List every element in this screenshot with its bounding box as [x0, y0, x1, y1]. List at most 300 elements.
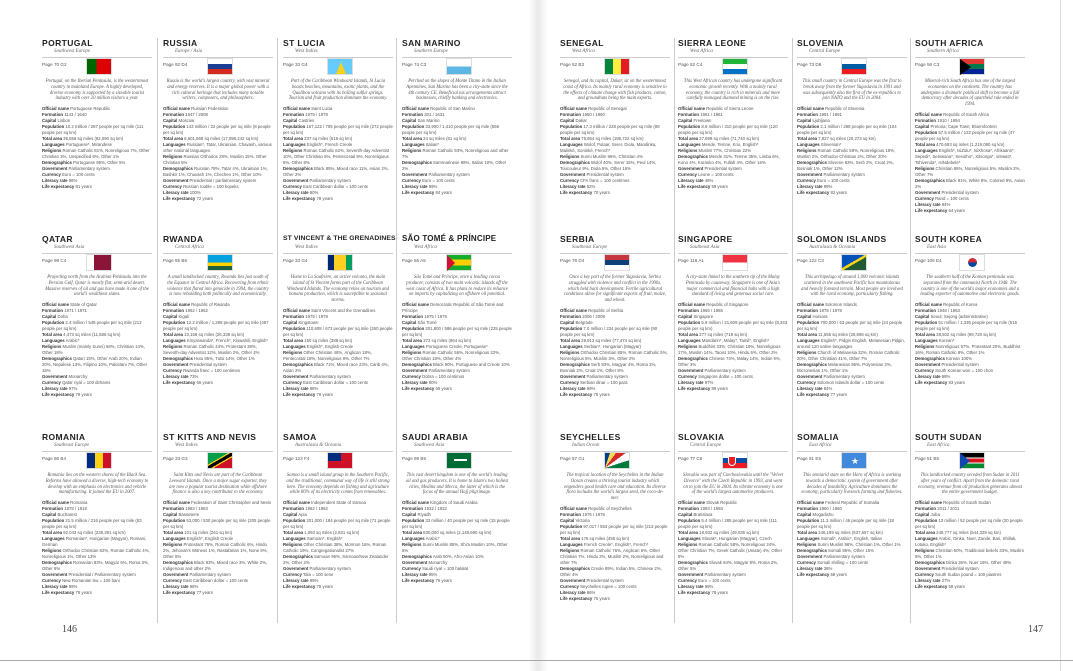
- card: Sao Tome: SÃO TOMÉ & PRÍNCIPE: [402, 234, 496, 243]
- card: Samoa: Currency Tala = 100 sene: [283, 572, 333, 577]
- card: St Kitts: West Indies: [175, 443, 198, 448]
- card: Somalia: Formation 1960 / 1960: [797, 506, 842, 511]
- card: Seychelles: Capital Victoria: [560, 518, 590, 523]
- card: Sierra Leone: West Africa: [690, 49, 713, 54]
- card: Slovakia: Central Europe: [690, 443, 721, 448]
- card: Senegal: Life expectancy 70 years: [560, 190, 610, 195]
- card: South Africa: SOUTH AFRICA: [915, 38, 984, 48]
- card: St Lucia: Page 33 G4: [283, 62, 308, 67]
- card: St Lucia: West Indies: [295, 49, 318, 54]
- card: Qatar: Capital Doha: [42, 314, 68, 319]
- card: Samoa: Formation 1962 / 1962: [283, 506, 328, 511]
- card: Serbia: Formation 2006 / 2008: [560, 314, 605, 319]
- card: Slovenia: Demographics Slovene 83%, Serb 2%, Croat 2%, Bosniak 1%, Other 12%: [797, 160, 894, 171]
- card: South Korea: Life expectancy 83 years: [915, 380, 965, 385]
- card: Rwanda: Religions Roman Catholic 44%, Protestant 38%, Seventh-day Adventist 12%, Muslim 2%, Other 4%: [163, 344, 260, 355]
- card: South Africa: Formation 1910 / 1994: [915, 118, 960, 123]
- card: Singapore: Demographics Chinese 74%, Malay 14%, Indian 9%, Other 3%: [678, 356, 781, 367]
- card: Romania: Languages Romanian*, Hungarian (Magyar), Romani, German: [42, 536, 146, 547]
- card: South Africa: Page 56 C3: [915, 62, 939, 67]
- card: St Vincent: Formation 1979 / 1979: [283, 314, 328, 319]
- card: St Lucia: Capital Castries: [283, 118, 314, 123]
- card: Slovenia: Literacy rate 99%: [797, 184, 832, 189]
- card: Samoa: Religions Other Christian 38%, Mormon 16%, Roman Catholic 19%, Congregationalist 27%: [283, 542, 386, 553]
- card: Russia: Life expectancy 72 years: [163, 196, 213, 201]
- card: Serbia: [560, 234, 670, 397]
- card: Rwanda: [163, 234, 273, 385]
- card: Qatar: Government Monarchy: [42, 374, 87, 379]
- card: Slovenia: SLOVENIA: [797, 38, 844, 48]
- card: Portugal: Total area 35,556 sq miles (92,090 sq km): [42, 136, 123, 141]
- card: Senegal: Languages Wolof, Pulaar, Serer, Diola, Mandinka, Malinké, Soninké, French*: [560, 142, 656, 153]
- card: Sierra Leone: Capital Freetown: [678, 118, 711, 123]
- card: Samoa: Samoa is a small island group in the Southern Pacific, and the traditional, communal way of life is still strong here. The economy depends on fishing and agriculture while 80% of its electricity comes from renewables.: [286, 473, 390, 495]
- card: San Marino: Population 33,900 / 1,410 people per sq mile (556 people per sq km): [402, 124, 499, 135]
- card: South Sudan: [915, 432, 1025, 589]
- card: St Vincent: Home to La Soufrière, an active volcano, the main island of St Vincent forms part of the Caribbean Windward Islands. The economy relies on tourism and banana production, which is susceptible to seasonal storms.: [287, 275, 389, 303]
- card: Portugal: Literacy rate 96%: [42, 178, 77, 183]
- card: Solomon Islands: Government Parliamentary system: [797, 374, 865, 379]
- card: St Lucia: Population 167,122 / 705 people per sq mile (272 people per sq km): [283, 124, 393, 135]
- card: Senegal: [560, 38, 670, 195]
- card: Solomon Islands: Life expectancy 77 years: [797, 392, 847, 397]
- card: San Marino: Total area 24 sq miles (61 sq km): [402, 136, 466, 141]
- card: Rwanda: Central Africa: [175, 245, 204, 250]
- card: South Sudan: Demographics Dinka 36%, Nuer 16%, Other 48%: [915, 560, 1011, 565]
- card: Saudi Arabia: [402, 432, 512, 583]
- card: St Kitts: Population 53,000 / 530 people per sq mile (205 people per sq km): [163, 518, 270, 529]
- card: Senegal: Page 52 B3: [560, 62, 584, 67]
- card: Rwanda: Page 55 B6: [163, 258, 187, 263]
- card: St Lucia: Total area 237 sq miles (616 sq km): [283, 136, 352, 141]
- card: Sao Tome: Demographics Black 90%, Portuguese and Creole 10%: [402, 362, 510, 367]
- card: Sierra Leone: Population 8.6 million / 310 people per sq mile (120 people per sq km): [678, 124, 778, 135]
- card: Senegal: Total area 75,954 sq miles (196,722 sq km): [560, 136, 644, 141]
- card: South Korea: Currency South Korean won = 100 chon: [915, 368, 993, 373]
- card: Somalia: Population 11.3 million / 46 people per sq mile (18 people per sq km): [797, 518, 894, 529]
- card: Sao Tome: [402, 234, 512, 391]
- card: South Sudan: Total area 248,777 sq miles (644,329 sq km): [915, 530, 1001, 535]
- card: Romania: Currency New Romanian leu = 100 bani: [42, 578, 120, 583]
- card: St Kitts: Total area 101 sq miles (261 sq km): [163, 530, 232, 535]
- card: Sierra Leone: [678, 38, 788, 189]
- card: Somalia: Currency Somali shilling = 100 cents: [797, 560, 868, 565]
- card: Seychelles: The tropical location of the Seychelles in the Indian Ocean creates a thriving tourist industry which engenders good health care and education. Its diverse flora includes the world's largest seed, the coco-de-mer.: [564, 473, 666, 501]
- card: South Africa: Government Presidential system: [915, 190, 979, 195]
- card: St Kitts: Official name Federation of Saint Christopher and Nevis: [163, 500, 271, 505]
- card: Portugal: Capital Lisbon: [42, 118, 70, 123]
- card: Saudi Arabia: Government Monarchy: [402, 560, 447, 565]
- card: Russia: Population 143 million / 22 people per sq mile (8 people per sq km): [163, 124, 271, 135]
- card: South Sudan: Page 51 B5: [915, 456, 939, 461]
- card: Serbia: Population 7.0 million / 234 people per sq mile (90 people per sq km): [560, 326, 657, 337]
- card: St Vincent: West Indies: [295, 245, 318, 250]
- card: Somalia: Languages Somali*, Arabic*, English, Italian: [797, 536, 882, 541]
- card: St Vincent: ST VINCENT & THE GRENADINES: [283, 235, 396, 242]
- card: St Kitts: Religions Protestant 76%, Roman Catholic 6%, Hindu 2%, Jehovah's Witness 1%, Rastafarian 1%, None 9%, Other 5%: [163, 542, 268, 559]
- card: Serbia: Official name Republic of Serbia: [560, 308, 623, 313]
- card: Singapore: Capital Singapore: [678, 314, 713, 319]
- card: Rwanda: Official name Republic of Rwanda: [163, 302, 230, 307]
- page number left: 146: [62, 624, 77, 635]
- card: Russia: Page 92 D4: [163, 62, 187, 67]
- card: South Korea: Page 106 E4: [915, 258, 942, 263]
- card: Singapore: Government Parliamentary system: [678, 368, 746, 373]
- card: Seychelles: Life expectancy 76 years: [560, 596, 610, 601]
- card: St Vincent: Religions Other Christian 48%, Anglican 18%, Pentecostal 18%, Nonreligious 9%, Other 7%: [283, 350, 372, 361]
- card: Singapore: Population 5.9 million / 21,609 people per sq mile (8,343 people per sq km): [678, 320, 787, 331]
- card: South Sudan: SOUTH SUDAN: [915, 432, 982, 442]
- card: Seychelles: Indian Ocean: [572, 443, 599, 448]
- card: Slovakia: [678, 432, 788, 595]
- card: Sierra Leone: Formation 1961 / 1961: [678, 112, 723, 117]
- card: Senegal: Senegal, and its capital, Dakar, sit on the westernmost coast of Africa. Its mainly rural economy is sensitive to the effects of climate change with fish products, cotton, and groundnuts being the main exports.: [563, 79, 667, 101]
- card: Qatar: QATAR: [42, 234, 73, 244]
- card: Samoa: Official name Independent State of Samoa: [283, 500, 366, 505]
- card: St Lucia: Demographics Black 85%, Mixed race 11%, Asian 2%, Other 2%: [283, 166, 389, 177]
- card: Somalia: SOMALIA: [797, 432, 839, 442]
- card: San Marino: Southern Europe: [414, 49, 448, 54]
- card: Seychelles: Total area 176 sq miles (455 sq km): [560, 536, 629, 541]
- card: Sierra Leone: Government Presidential system: [678, 166, 742, 171]
- card: St Kitts: Demographics Black 93%, Mixed race 3%, White 2%, Indigenous and other 2%: [163, 560, 267, 571]
- card: Saudi Arabia: Total area 830,000 sq miles (2,149,690 sq km): [402, 530, 492, 535]
- card: South Africa: Total area 470,693 sq miles (1,219,090 sq km): [915, 142, 1004, 147]
- card: Slovakia: Slovakia was part of Czechoslovakia until the "Velvet Divorce" with the Czech Republic in 1993, and went on to join the EU in 2004. Its vibrant economy is one of the world's largest automotive producers.: [683, 473, 783, 495]
- card: Portugal: Southwest Europe: [54, 49, 90, 54]
- card: Romania: Formation 1878 / 1919: [42, 506, 87, 511]
- card: Rwanda: Formation 1962 / 1962: [163, 308, 208, 313]
- card: Seychelles: Formation 1976 / 1976: [560, 512, 605, 517]
- card: Rwanda: Currency Rwanda franc = 100 centimes: [163, 368, 240, 373]
- card: Serbia: Religions Orthodox Christian 85%, Roman Catholic 5%, Nonreligious 5%, Muslim 3%, Other 2%: [560, 350, 668, 361]
- card: Sierra Leone: Currency Leone = 100 cents: [678, 172, 734, 177]
- card: Russia: Languages Russian*, Tatar, Ukrainian, Chavash, various other national languages: [163, 142, 272, 153]
- card: St Vincent: Languages English*, English Creole: [283, 344, 353, 349]
- card: Romania: Life expectancy 76 years: [42, 590, 92, 595]
- card: Senegal: Population 17.3 million / 228 people per sq mile (88 people per sq km): [560, 124, 660, 135]
- card: Sao Tome: Currency Dobra = 100 céntimos: [402, 374, 464, 379]
- card: Saudi Arabia: Literacy rate 95%: [402, 572, 437, 577]
- card: Somalia: ★: [851, 456, 859, 466]
- card: South Korea: The southern half of the Korean peninsula was separated from the communist North in 1948. The country is one of the world's major economies and a leading exporter of automotive and electronic goods.: [920, 275, 1020, 297]
- card: Portugal: Languages Portuguese*, Mirandese: [42, 142, 112, 147]
- card: Saudi Arabia: Demographics Arab 90%, Afro-Asian 10%: [402, 554, 484, 559]
- card: Rwanda: Life expectancy 66 years: [163, 380, 213, 385]
- card: Serbia: Demographics Serb 83%, Magyar 4%, Roma 2%, Bosniak 2%, Croat 1%, Other 8%: [560, 362, 656, 373]
- card: Singapore: Literacy rate 97%: [678, 380, 713, 385]
- card: Serbia: Once a key part of the former Yugoslavia, Serbia struggled with violence and conflict in the 1990s, which held back development. Fertile agricultural conditions allow for significant exports of fruit, maize, and wheat.: [564, 275, 666, 303]
- card: Samoa: Total area 1,093 sq miles (2,831 sq km): [283, 530, 359, 535]
- card: Slovenia: Religions Roman Catholic 58%, Nonreligious 18%, Muslim 2%, Orthodox Christian 2%, Other 20%: [797, 148, 895, 159]
- card: Saudi Arabia: Formation 1932 / 1932: [402, 506, 447, 511]
- card: Sierra Leone: Religions Muslim 77%, Christian 22%: [678, 148, 751, 153]
- card: Somalia: Capital Mogadishu: [797, 512, 834, 517]
- card: Somalia: Official name Federal Republic of Somalia: [797, 500, 879, 505]
- card: Slovakia: Government Parliamentary system: [678, 572, 746, 577]
- card: St Kitts: Capital Basseterre: [163, 512, 199, 517]
- card: Solomon Islands: Population 700,000 / 63 people per sq mile (24 people per sq km): [797, 320, 902, 331]
- card: Samoa: Population 201,000 / 184 people per sq mile (71 people per sq km): [283, 518, 390, 529]
- card: Slovakia: SLOVAKIA: [678, 432, 724, 442]
- card: Samoa: Literacy rate 99%: [283, 578, 318, 583]
- card: Somalia: East Africa: [809, 443, 832, 448]
- card: Portugal: PORTUGAL: [42, 38, 93, 48]
- card: Saudi Arabia: Currency Saudi riyal = 100 halalat: [402, 566, 468, 571]
- card: Slovenia: Page 73 D8: [797, 62, 821, 67]
- card: Solomon Islands: Page 122 C3: [797, 258, 824, 263]
- card: Seychelles: [560, 432, 670, 601]
- card: Russia: Russia is the world's largest country, with vast mineral and energy reserves. It is a major global power with a rich cultural heritage that includes many notable writers, composers, and philosophers.: [167, 79, 269, 101]
- card: St Lucia: ST LUCIA: [283, 38, 325, 48]
- card: Qatar: Languages Arabic*: [42, 338, 80, 343]
- card: Qatar: Demographics Qatari 15%, Other Arab 20%, Indian 20%, Nepalese 13%, Filipino 10%, Pakistani 7%, Other 15%: [42, 356, 147, 373]
- card: St Vincent: Literacy rate 88%: [283, 386, 318, 391]
- card: Senegal: Currency CFA franc = 100 centimes: [560, 178, 629, 183]
- card: Slovakia: Capital Bratislava: [678, 512, 712, 517]
- card: Senegal: Literacy rate 52%: [560, 184, 595, 189]
- card: Romania: Religions Orthodox Christian 82%, Roman Catholic 4%, Nonreligious 1%, Other 13%: [42, 548, 150, 559]
- card: Somalia: [797, 432, 907, 577]
- card: South Korea: [915, 234, 1025, 385]
- card: Singapore: Total area 277 sq miles (719 sq km): [678, 332, 747, 337]
- card: Romania: [42, 432, 152, 595]
- card: San Marino: SAN MARINO: [402, 38, 461, 48]
- card: Seychelles: Languages French Creole*, English*, French*: [560, 542, 648, 547]
- card: Singapore: SINGAPORE: [678, 234, 733, 244]
- card: South Africa: Life expectancy 64 years: [915, 208, 965, 213]
- card: St Kitts: Saint Kitts and Nevis are part of the Caribbean Leeward Islands. Once a major sugar exporter, they are now a popular tourist destination while offshore finance is also a key contributor to the economy.: [169, 473, 267, 495]
- card: Saudi Arabia: Population 33 million / 40 people per sq mile (15 people per sq km): [402, 518, 510, 529]
- card: Russia: Literacy rate 100%: [163, 190, 201, 195]
- card: Somalia: Page 51 E5: [797, 456, 821, 461]
- card: St Kitts: Literacy rate 98%: [163, 584, 198, 589]
- card: San Marino: Government Parliamentary system: [402, 172, 470, 177]
- card: Solomon Islands: SOLOMON ISLANDS: [797, 234, 887, 244]
- gutter shade: [528, 0, 548, 671]
- card: Romania: Southeast Europe: [54, 443, 89, 448]
- card: Solomon Islands: Religions Church of Melanesia 32%, Roman Catholic 20%, Other Christian 41%, Other 7%: [797, 350, 900, 361]
- card: Qatar: Religions Muslim (mainly Sunni) 68%, Christian 14%, Other 18%: [42, 344, 145, 355]
- card: Sao Tome: Languages Portuguese Creole, Portuguese*: [402, 344, 488, 349]
- card: Seychelles: Demographics Creole 89%, Indian 5%, Chinese 2%, Other 4%: [560, 566, 662, 577]
- card: Samoa: Life expectancy 75 years: [283, 584, 333, 589]
- card: South Africa: Languages English*, IsiZulu*, IsiXhosa*, Afrikaans*, Sepedi*, Setswana*, Sesotho*, Xitsonga*, siSwati*, Tshivenda*, IsiNdebele*: [915, 148, 1015, 165]
- card: Singapore: Official name Republic of Singapore: [678, 302, 748, 307]
- card: Samoa: Page 123 F4: [283, 456, 309, 461]
- card: Rwanda: Government Presidential system: [163, 362, 227, 367]
- card: San Marino: Languages Italian*: [402, 142, 439, 147]
- card: Senegal: Official name Republic of Senegal: [560, 106, 627, 111]
- card: St Vincent: [283, 235, 396, 397]
- card: Russia: Government Presidential / parliamentary system: [163, 178, 256, 183]
- card: St Kitts: ST KITTS AND NEVIS: [163, 432, 256, 442]
- card: Somalia: Literacy rate 38%: [797, 566, 832, 571]
- card: South Africa: Religions Christian 86%, Nonreligious 5%, Muslim 2%, Other 7%: [915, 166, 1021, 177]
- card: Saudi Arabia: Official name Kingdom of Saudi Arabia: [402, 500, 477, 505]
- card: Solomon Islands: Currency Solomon Islands dollar = 100 cents: [797, 380, 884, 385]
- card: Russia: [163, 38, 273, 201]
- card: Senegal: SENEGAL: [560, 38, 604, 48]
- page number right: 147: [1028, 624, 1043, 635]
- card: Senegal: Religions Sunni Muslim 96%, Christian 4%: [560, 154, 643, 159]
- card: Serbia: Life expectancy 76 years: [560, 392, 610, 397]
- card: Singapore: Languages Mandarin*, Malay*, Tamil*, English*: [678, 338, 769, 343]
- card: Romania: Official name Romania: [42, 500, 87, 505]
- card: Qatar: Projecting north from the Arabian Peninsula into the Persian Gulf, Qatar is mostly flat, semi-arid desert. Massive reserves of oil and gas have made it one of the world's wealthiest states.: [45, 275, 149, 297]
- card: Serbia: SERBIA: [560, 234, 595, 244]
- card: South Sudan: Population 13 million / 52 people per sq mile (20 people per sq km): [915, 518, 1023, 529]
- card: Saudi Arabia: Page 99 B5: [402, 456, 426, 461]
- card: Seychelles: Literacy rate 96%: [560, 590, 595, 595]
- card: South Africa: [915, 38, 1025, 213]
- card: Slovakia: Life expectancy 78 years: [678, 590, 728, 595]
- card: Slovenia: Central Europe: [809, 49, 840, 54]
- card: Russia: Demographics Russian 78%, Tatar 4%, Ukrainian 1%, Bashkir 1%, Chuvash 1%, Chechen 1%, Other 10%: [163, 166, 268, 177]
- card: St Kitts: Formation 1983 / 1983: [163, 506, 208, 511]
- card: Qatar: Page 98 C4: [42, 258, 66, 263]
- card: Portugal: Religions Roman Catholic 81%, Nonreligious 7%, Other Christian 3%, Unspecified 8%, Other 1%: [42, 148, 150, 159]
- card: Qatar: Southwest Asia: [54, 245, 84, 250]
- card: Solomon Islands: Languages English*, Pidgin English, Melanesian Pidgin, around 120 native languages: [797, 338, 905, 349]
- card: South Sudan: This landlocked country seceded from Sudan in 2011 after years of conflict. Apart from the domestic rural economy, revenue from oil production generates almost the entire government budget.: [918, 473, 1022, 495]
- card: Seychelles: Currency Seychelles rupee = 100 cents: [560, 584, 637, 589]
- card: Seychelles: Official name Republic of Seychelles: [560, 506, 632, 511]
- card: South Korea: Formation 1948 / 1953: [915, 308, 960, 313]
- card: Qatar: [42, 234, 152, 397]
- card: Sierra Leone: Official name Republic of Sierra Leone: [678, 106, 753, 111]
- card: Portugal: [42, 38, 152, 189]
- card: Romania: Demographics Romanian 83%, Magyar 6%, Roma 3%, Other 8%: [42, 560, 149, 571]
- card: St Kitts: Life expectancy 77 years: [163, 590, 213, 595]
- card: Seychelles: Government Presidential system: [560, 578, 624, 583]
- card: Romania: Page 86 B4: [42, 456, 66, 461]
- card: St Kitts: Languages English*, English Creole: [163, 536, 233, 541]
- card: Russia: Formation 1547 / 2008: [163, 112, 208, 117]
- card: Senegal: West Africa: [572, 49, 595, 54]
- card: Qatar: Total area 4,473 sq miles (11,586 sq km): [42, 332, 120, 337]
- card: Slovakia: Demographics Slovak 84%, Magyar 8%, Roma 2%, Other 5%: [678, 560, 778, 571]
- card: Singapore: Southeast Asia: [690, 245, 720, 250]
- card: Russia: RUSSIA: [163, 38, 198, 48]
- card: Senegal: Government Presidential system: [560, 172, 624, 177]
- card: Rwanda: Literacy rate 73%: [163, 374, 198, 379]
- card: South Africa: Literacy rate 94%: [915, 202, 950, 207]
- card: San Marino: Perched on the slopes of Monte Titano in the Italian Apennines, San Marino has been a city-state since the 4th century CE. Beneficial tax arrangements attract businesses, chiefly banking and electronics.: [406, 79, 508, 101]
- card: San Marino: Demographics Sammarinese 88%, Italian 10%, Other 2%: [402, 160, 506, 171]
- card: Slovenia: Languages Slovenian*: [797, 142, 841, 147]
- card: St Kitts: Page 33 G3: [163, 456, 188, 461]
- card: Portugal: Government Parliamentary system: [42, 166, 110, 171]
- card: Romania: Romania lies on the western shores of the Black Sea. Reforms have allowed a diverse, high-tech economy to develop with an emphasis on electronics and vehicle manufacturing. It joined the EU in 2007.: [46, 473, 148, 495]
- card: St Lucia: Government Parliamentary system: [283, 178, 351, 183]
- card: Qatar: Literacy rate 97%: [42, 386, 77, 391]
- card: St Vincent: Life expectancy 76 years: [283, 392, 333, 397]
- card: Saudi Arabia: This vast desert kingdom is one of the world's leading oil and gas producers. It is home to Islam's two holiest cities, Medina and Mecca, the latter of which is the focus of the annual Hajj pilgrimage.: [406, 473, 508, 495]
- card: South Sudan: Capital Juba: [915, 512, 940, 517]
- card: Slovakia: Population 5.4 million / 285 people per sq mile (111 people per sq km): [678, 518, 777, 529]
- card: Sao Tome: Literacy rate 90%: [402, 380, 437, 385]
- card: St Kitts: Government Parliamentary system: [163, 572, 231, 577]
- card: Seychelles: Religions Roman Catholic 76%, Anglican 6%, Other Christian 7%, Hindu 2%, Muslim 2%, Nonreligious and other 7%: [560, 548, 663, 565]
- card: Somalia: This semiarid state on the Horn of Africa is working towards a democratic system of government after decades of instability. Agriculture dominates the economy, particularly livestock farming and fisheries.: [801, 473, 903, 495]
- card: Saudi Arabia: Religions Sunni Muslim 85%, Shi'a Muslim 10%, Other 5%: [402, 542, 508, 553]
- card: St Lucia: Part of the Caribbean Windward Islands, St Lucia boasts beaches, mountains, exotic plants, and the Qualibou volcano with its boiling sulfur springs. Tourism and fruit production dominate the economy.: [289, 79, 387, 101]
- card: Slovenia: [797, 38, 907, 195]
- card: Serbia: Government Parliamentary system: [560, 374, 628, 379]
- card: Portugal: Official name Portuguese Republic: [42, 106, 110, 111]
- card: Somalia: Demographics Somali 85%, Other 15%: [797, 548, 874, 553]
- card: Slovakia: Literacy rate 99%: [678, 584, 713, 589]
- card: Rwanda: Languages Kinyarwanda*, French*, Kiswahili, English*: [163, 338, 268, 343]
- card: Saudi Arabia: Southwest Asia: [414, 443, 444, 448]
- card: St Vincent: Total area 150 sq miles (389 sq km): [283, 338, 352, 343]
- card: Solomon Islands: Capital Honiara: [797, 314, 828, 319]
- card: Russia: Europe / Asia: [175, 49, 202, 54]
- card: St Lucia: Languages English*, French Creole: [283, 142, 352, 147]
- card: Singapore: A city-state linked to the southern tip of the Malay Peninsula by causeway, Singapore is one of Asia's major commercial and financial hubs with a high standard of living and generous social care.: [686, 275, 780, 297]
- card: Russia: Total area 6,601,668 sq miles (17,098,242 sq km): [163, 136, 258, 141]
- card: Slovenia: Official name Republic of Slovenia: [797, 106, 864, 111]
- card: Solomon Islands: Official name Solomon Islands: [797, 302, 857, 307]
- card: Saudi Arabia: Life expectancy 76 years: [402, 578, 452, 583]
- card: Sao Tome: Page 55 A5: [402, 258, 426, 263]
- card: Samoa: Capital Apia: [283, 512, 307, 517]
- card: Qatar: Currency Qatar riyal = 100 dirhams: [42, 380, 110, 385]
- card: Romania: Capital Bucharest: [42, 512, 77, 517]
- card: South Africa: Population 57.5 million / 122 people per sq mile (47 people per sq km): [915, 130, 1015, 141]
- card: San Marino: Literacy rate 99%: [402, 184, 437, 189]
- card: Slovakia: Page 77 C6: [678, 456, 702, 461]
- card: South Korea: Capital Seoul; Sejong (administrative): [915, 314, 988, 319]
- card: Samoa: [283, 432, 393, 589]
- card: Serbia: Southeast Europe: [572, 245, 607, 250]
- card: Slovakia: Currency Euro = 100 cents: [678, 578, 731, 583]
- card: St Vincent: Population 110,608 / 673 people per sq mile (260 people per sq km): [283, 326, 393, 337]
- card: Serbia: Languages Serbian*, Hungarian (Magyar): [560, 344, 641, 349]
- card: Seychelles: Population 97,017 / 553 people per sq mile (213 people per sq km): [560, 524, 668, 535]
- card: Saudi Arabia: Languages Arabic*: [402, 536, 440, 541]
- card: Romania: Government Presidential / Parliamentary system: [42, 572, 136, 577]
- card: South Sudan: Government Presidential system: [915, 566, 979, 571]
- card: Portugal: Currency Euro = 100 cents: [42, 172, 95, 177]
- card: Solomon Islands: [797, 234, 907, 397]
- card: Sao Tome: Official name Democratic Republic of São Tomé and Príncipe: [402, 302, 503, 313]
- card: Sao Tome: Government Parliamentary system: [402, 368, 470, 373]
- card: St Kitts: [163, 432, 273, 595]
- card: Sierra Leone: Languages Mende, Temne, Krio, English*: [678, 142, 758, 147]
- card: Samoa: Australasia & Oceania: [295, 443, 341, 448]
- card: South Korea: East Asia: [927, 245, 946, 250]
- card: Rwanda: Population 12.2 million / 1,288 people per sq mile (497 people per sq km): [163, 320, 269, 331]
- card: Qatar: Formation 1971 / 1971: [42, 308, 87, 313]
- card: Serbia: Currency Serbian dinar = 100 para: [560, 380, 628, 385]
- card: Saudi Arabia: Capital Riyadh: [402, 512, 431, 517]
- card: Portugal: Portugal, on the Iberian Peninsula, is the westernmost country in mainland Europe. A highly developed, diverse economy is supported by a sizeable tourist industry with over 20 million visitors a year.: [46, 79, 148, 101]
- card: Slovakia: Languages Slovak*, Hungarian (Magyar), Czech: [678, 536, 772, 541]
- card: South Sudan: Literacy rate 27%: [915, 578, 950, 583]
- card: South Sudan: East Africa: [927, 443, 950, 448]
- card: San Marino: Religions Roman Catholic 93%, Nonreligious and other 7%: [402, 148, 509, 159]
- card: Samoa: Demographics Samoan 96%, Samoan/New Zealander 2%, Other 2%: [283, 554, 389, 565]
- card: Sao Tome: Religions Roman Catholic 56%, Nonreligious 22%, Other Christian 18%, Other 4%: [402, 350, 500, 361]
- card: South Korea: Official name Republic of Korea: [915, 302, 977, 307]
- card: South Sudan: Life expectancy 58 years: [915, 584, 965, 589]
- card: Russia: Official name Russian Federation: [163, 106, 228, 111]
- card: Serbia: Total area 29,913 sq miles (77,474 sq km): [560, 338, 641, 343]
- card: Sao Tome: Formation 1975 / 1975: [402, 314, 447, 319]
- card: Serbia: Capital Belgrade: [560, 320, 593, 325]
